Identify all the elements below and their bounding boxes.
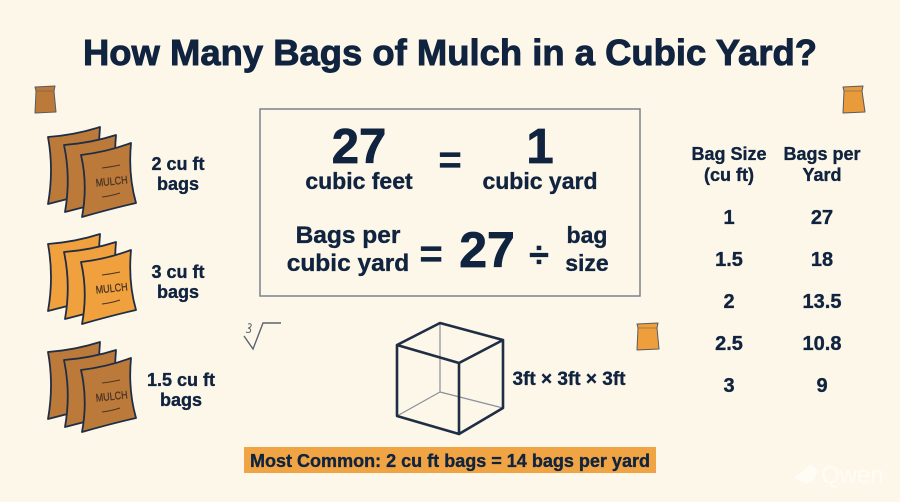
table header: Yard xyxy=(802,165,842,185)
table rows xyxy=(715,207,841,397)
title: How Many Bags of Mulch in a Cubic Yard? xyxy=(83,32,817,73)
division sign: ÷ xyxy=(529,234,549,275)
icon: brown bag stack, 1.5 cu ft: MULCH xyxy=(95,389,128,405)
label: 2 cu ft bags xyxy=(151,154,205,194)
icon: orange bag stack, 3 cu ft: MULCH xyxy=(95,281,128,297)
equals sign, second row: = xyxy=(419,232,443,276)
table rows: 10.8 xyxy=(803,333,841,355)
table rows: 9 xyxy=(816,375,828,397)
table header xyxy=(691,144,861,185)
icon: cube root symbol xyxy=(244,323,281,349)
label: 2 cu ft bags: bags xyxy=(157,174,199,194)
formula: 1 cubic yard: cubic yard xyxy=(482,168,598,194)
label: 1.5 cu ft bags: 1.5 cu ft xyxy=(147,370,215,390)
formula: 27 cubic feet xyxy=(305,120,413,194)
formula: bags per cubic yard xyxy=(287,222,409,277)
icon: small bag top left xyxy=(35,86,56,113)
label: 1.5 cu ft bags xyxy=(147,370,215,410)
table rows: 2 xyxy=(723,291,735,313)
icon: small bag by cube xyxy=(637,323,659,350)
icon: brown bag stack, 1.5 cu ft xyxy=(48,342,136,432)
icon: wireframe cube xyxy=(397,323,503,434)
formula: bag size xyxy=(565,222,609,276)
panel: formula box xyxy=(260,109,640,296)
formula: 27: 27 xyxy=(459,222,515,278)
table rows: 13.5 xyxy=(803,291,841,313)
label: 3 cu ft bags xyxy=(151,262,205,302)
callout: most common: Most Common: 2 cu ft bags = 14 bags per yard xyxy=(250,451,650,471)
watermark: Qwen: Qwen xyxy=(821,462,884,489)
label: cube dimensions: 3ft × 3ft × 3ft xyxy=(513,369,626,390)
formula: bags per cubic yard: cubic yard xyxy=(287,250,409,277)
table rows: 27 xyxy=(811,207,833,229)
formula: bag size: size xyxy=(565,250,609,276)
formula: bags per cubic yard: Bags per xyxy=(296,222,401,249)
table rows: 1.5 xyxy=(715,249,743,271)
label: 1.5 cu ft bags: bags xyxy=(160,390,202,410)
formula: 1 cubic yard: 1 xyxy=(526,120,554,174)
table rows: 2.5 xyxy=(715,333,743,355)
table header: Bags per xyxy=(783,144,861,164)
icon: orange bag stack, 3 cu ft xyxy=(48,234,136,324)
table header: Bag Size xyxy=(691,144,767,164)
watermark: Qwen xyxy=(794,462,884,489)
table header: (cu ft) xyxy=(704,165,754,185)
equals sign, first row: = xyxy=(438,138,462,182)
table rows: 1 xyxy=(723,207,735,229)
table rows: 3 xyxy=(723,375,735,397)
label: 2 cu ft bags: 2 cu ft xyxy=(151,154,205,174)
icon: brown bag stack, 2 cu ft xyxy=(48,127,136,217)
formula: 27 cubic feet: 27 xyxy=(332,120,386,174)
icon: brown bag stack, 2 cu ft: MULCH xyxy=(95,174,128,190)
icon: small bag top right xyxy=(843,86,865,113)
formula: 1 cubic yard xyxy=(482,120,598,194)
formula: bag size: bag xyxy=(567,222,607,248)
label: 3 cu ft bags: 3 cu ft xyxy=(151,262,205,282)
formula: 27 cubic feet: cubic feet xyxy=(305,168,413,194)
table: bag sizes xyxy=(691,144,861,397)
label: 3 cu ft bags: bags xyxy=(157,282,199,302)
table rows: 18 xyxy=(811,249,833,271)
